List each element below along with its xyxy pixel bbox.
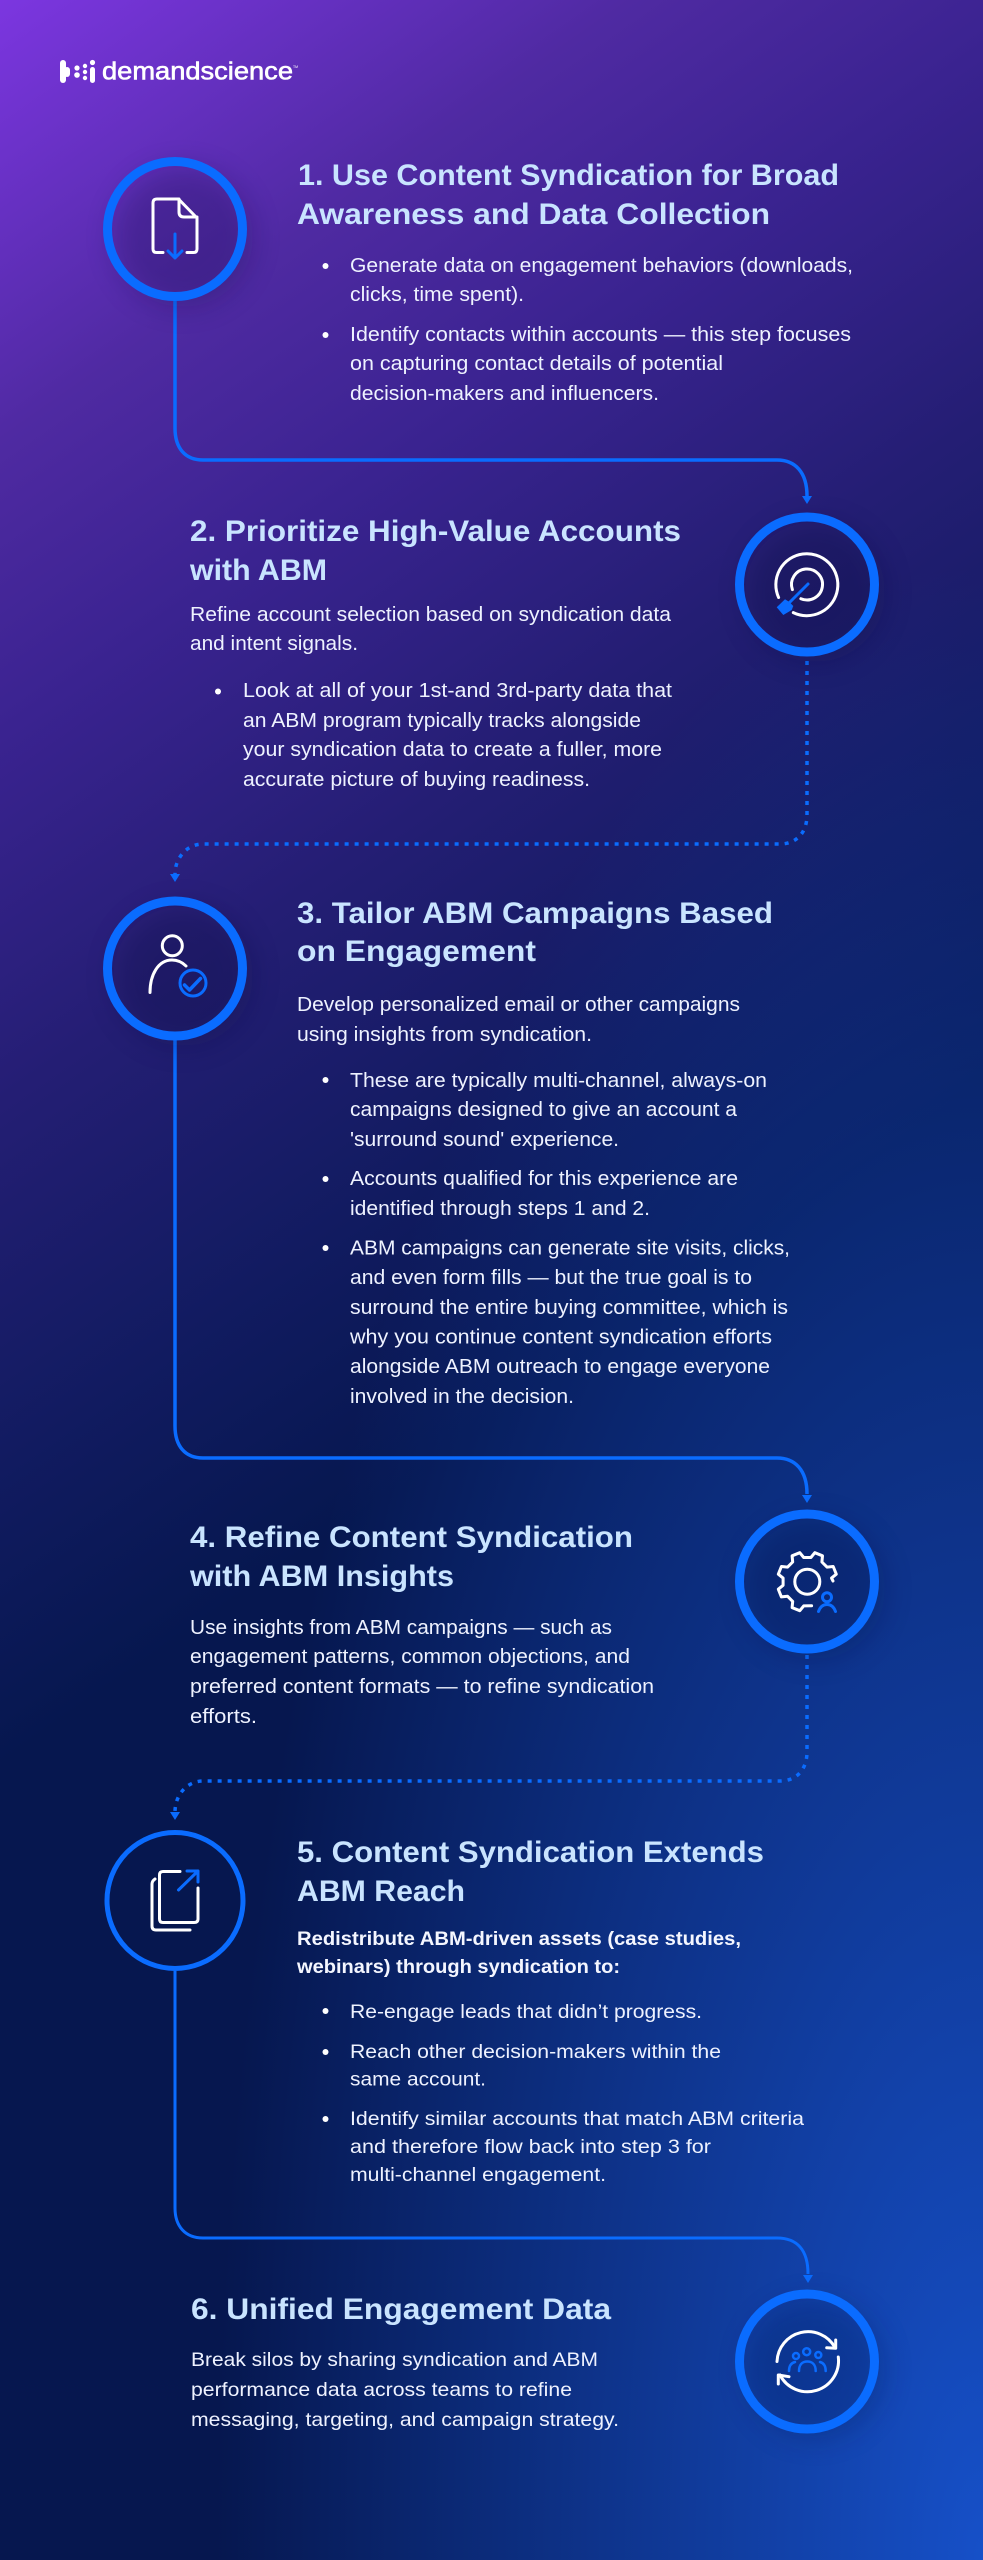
icon: sync arrows with team xyxy=(740,2294,885,2439)
logo: demandscience: demandscience xyxy=(102,58,293,86)
logo: demandscience: TM xyxy=(293,64,298,69)
heading: step 4 xyxy=(189,1521,633,1593)
intro text: step 2 xyxy=(190,604,672,655)
body text: step 6: performance data across teams to refine xyxy=(191,2379,572,2401)
panel: step 4 xyxy=(189,1514,885,1728)
heading: step 5: ABM Reach xyxy=(297,1875,465,1908)
bullet list: step 3: surround the entire buying committee, which is xyxy=(350,1297,788,1319)
heading: step 2 xyxy=(189,515,681,587)
bullet list: step 2: an ABM program typically tracks alongside xyxy=(243,710,641,732)
body text: step 6: Break silos by sharing syndication and ABM xyxy=(191,2349,598,2371)
bullet list: step 5: Reach other decision-makers within the xyxy=(350,2041,721,2063)
panel: step 2 xyxy=(189,515,885,791)
body text: step 4: efforts. xyxy=(190,1706,257,1728)
intro text: step 5 xyxy=(296,1928,741,1978)
heading: step 4: with ABM Insights xyxy=(189,1560,454,1593)
bullet list: step 3: alongside ABM outreach to engage everyone xyxy=(350,1356,770,1378)
bullet list: step 3: involved in the decision. xyxy=(350,1386,574,1408)
intro text: step 3 xyxy=(297,994,740,1046)
heading: step 1: Awareness and Data Collection xyxy=(297,198,770,231)
heading: step 2: with ABM xyxy=(189,554,327,587)
bullet list: step 5: Identify similar accounts that match ABM criteria xyxy=(350,2108,804,2130)
connector: step 2 to step 3 (dotted) xyxy=(170,661,807,882)
bullet list: step 1: on capturing contact details of potential xyxy=(350,353,723,375)
heading: step 1 xyxy=(297,159,839,231)
icon: gear with person xyxy=(740,1514,885,1659)
connector: step 5 to step 6 xyxy=(175,1971,813,2283)
heading: step 3: 3. Tailor ABM Campaigns Based xyxy=(297,897,773,930)
intro text: step 3: Develop personalized email or other campaigns xyxy=(297,994,740,1016)
heading: step 2: 2. Prioritize High-Value Accounts xyxy=(190,515,681,548)
body text: step 6: messaging, targeting, and campaign strategy. xyxy=(191,2409,619,2431)
bullet list: step 3 xyxy=(322,1070,790,1408)
body text: step 4: Use insights from ABM campaigns — such as xyxy=(190,1617,612,1639)
intro text: step 3: using insights from syndication. xyxy=(297,1024,592,1046)
bullet list: step 3: These are typically multi-channel, always-on xyxy=(350,1070,767,1092)
icon: target with arrow xyxy=(740,517,885,662)
bullet list: step 3: ABM campaigns can generate site visits, clicks, xyxy=(350,1238,790,1260)
bullet list: step 2: accurate picture of buying readiness. xyxy=(243,769,590,791)
panel: step 5 xyxy=(107,1832,804,2186)
bullet list: step 5: Re-engage leads that didn’t progress. xyxy=(350,2001,702,2023)
heading: step 4: 4. Refine Content Syndication xyxy=(190,1521,633,1554)
heading: step 5: 5. Content Syndication Extends xyxy=(297,1836,764,1869)
intro text: step 2: and intent signals. xyxy=(190,633,358,655)
bullet list: step 3: Accounts qualified for this experience are xyxy=(350,1168,738,1190)
bullet list: step 3: 'surround sound' experience. xyxy=(350,1129,619,1151)
bullet list: step 5: same account. xyxy=(350,2068,486,2090)
heading: step 5 xyxy=(297,1836,764,1908)
icon: document download xyxy=(108,162,253,307)
bullet list: step 3: campaigns designed to give an account a xyxy=(350,1099,738,1121)
bullet list: step 3: identified through steps 1 and 2. xyxy=(350,1198,650,1220)
body text: step 4 xyxy=(190,1617,654,1728)
panel: step 3 xyxy=(108,897,790,1408)
heading: step 3 xyxy=(297,897,773,968)
body text: step 6 xyxy=(191,2349,619,2431)
intro text: step 5: Redistribute ABM-driven assets (case studies, xyxy=(297,1928,741,1950)
bullet list: step 3: why you continue content syndication efforts xyxy=(349,1326,772,1348)
heading: step 3: on Engagement xyxy=(297,935,536,968)
intro text: step 2: Refine account selection based on syndication data xyxy=(190,604,672,626)
bullet list: step 2 xyxy=(215,680,672,791)
bullet list: step 5: and therefore flow back into step 3 for xyxy=(350,2136,712,2158)
bullet list: step 3: and even form fills — but the true goal is to xyxy=(350,1267,752,1289)
connector: step 4 to step 5 (dotted) xyxy=(170,1655,807,1820)
bullet list: step 1: Identify contacts within accounts — this step focuses xyxy=(350,324,851,346)
body text: step 4: preferred content formats — to refine syndication xyxy=(190,1676,654,1698)
panel: step 1 xyxy=(108,159,853,405)
bullet list: step 1 xyxy=(322,255,853,405)
bullet list: step 2: Look at all of your 1st-and 3rd-party data that xyxy=(243,680,672,702)
panel: step 6 xyxy=(191,2293,885,2439)
bullet list: step 1: Generate data on engagement behaviors (downloads, xyxy=(350,255,853,277)
bullet list: step 5 xyxy=(322,2001,804,2186)
bullet list: step 1: decision-makers and influencers. xyxy=(350,383,659,405)
heading: step 6: 6. Unified Engagement Data xyxy=(191,2293,612,2326)
heading: step 1: 1. Use Content Syndication for Broad xyxy=(298,159,839,192)
connector: step 1 to step 2 xyxy=(175,301,812,504)
icon: share documents xyxy=(107,1832,243,1968)
intro text: step 5: webinars) through syndication to: xyxy=(296,1956,620,1978)
bullet list: step 5: multi-channel engagement. xyxy=(350,2164,606,2186)
bullet list: step 1: clicks, time spent). xyxy=(350,284,524,306)
icon: person with check badge xyxy=(108,901,253,1046)
body text: step 4: engagement patterns, common objections, and xyxy=(190,1646,630,1668)
bullet list: step 2: your syndication data to create a fuller, more xyxy=(243,739,662,761)
connector: step 3 to step 4 xyxy=(175,1040,812,1503)
